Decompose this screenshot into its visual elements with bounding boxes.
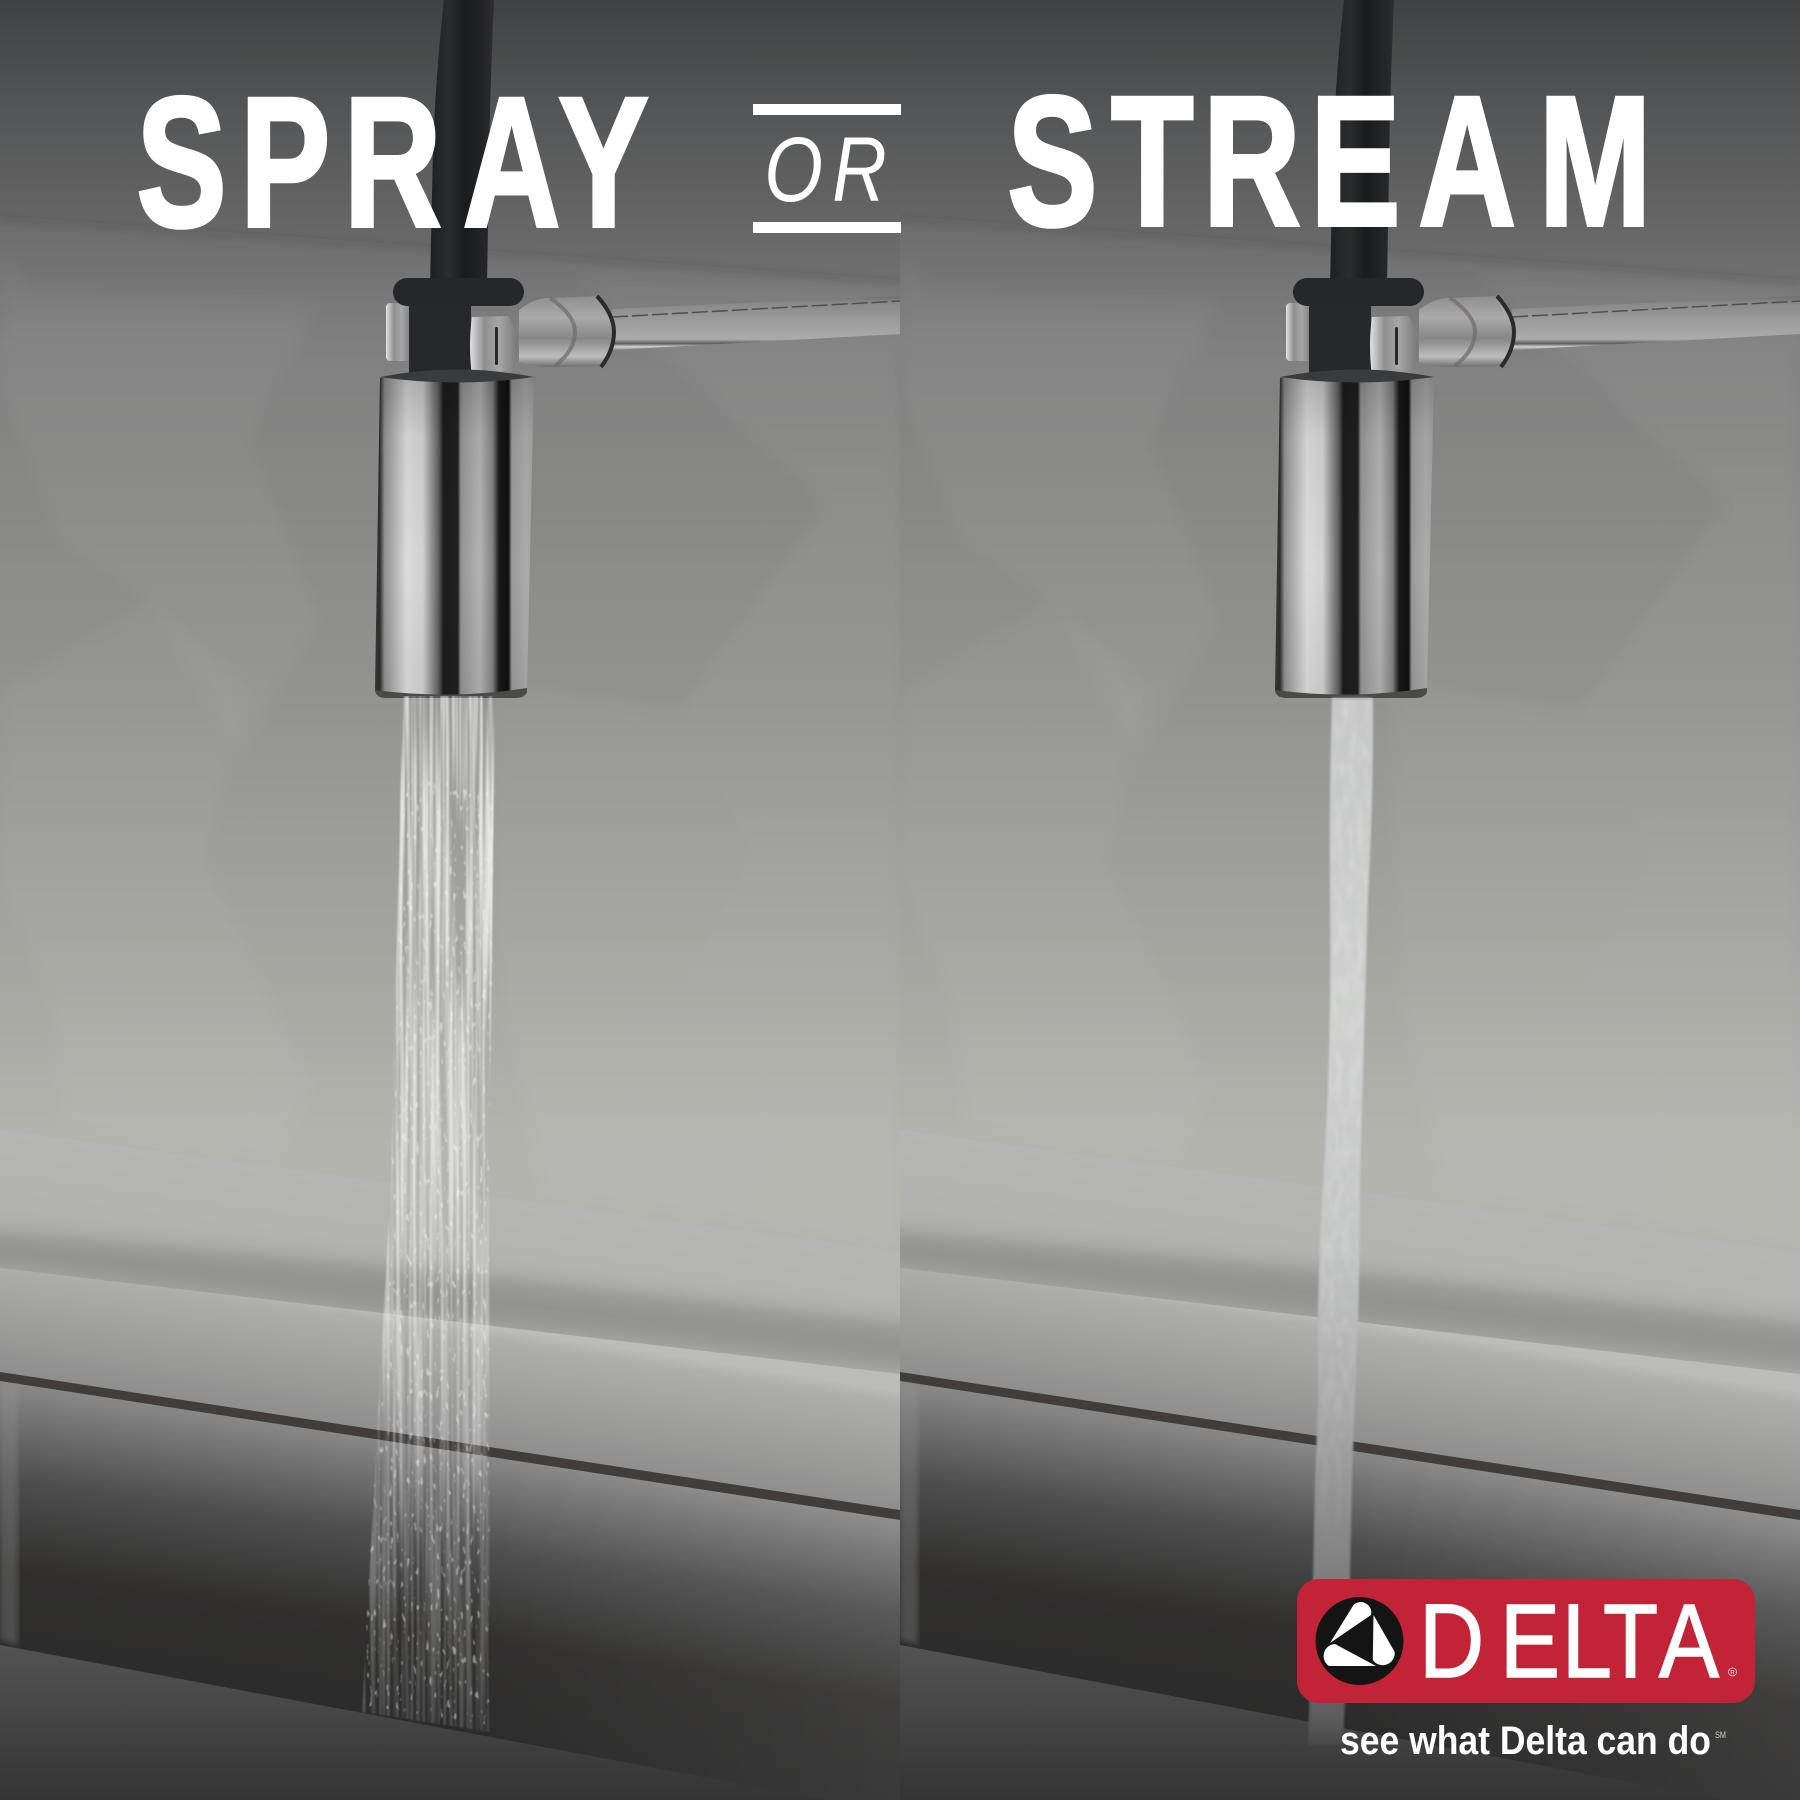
water: spray streaks [362, 696, 495, 1732]
faucet: stream head [1275, 0, 1800, 698]
logo: Delta badge [1297, 1579, 1755, 1703]
registered mark [1728, 1668, 1736, 1676]
connector: OR between rules [753, 104, 901, 233]
wordmark: DELTA: DELTA [1419, 1582, 1720, 1700]
registered mark: R [1730, 1670, 1735, 1676]
water: solid stream [1308, 698, 1373, 1745]
tagline: see what Delta can do [1340, 1719, 1711, 1763]
icon: Delta triangular mark [1316, 1597, 1404, 1685]
panel: spray scene (left photo) [0, 0, 940, 1800]
connector: OR between rules: OR [764, 118, 887, 221]
faucet: spray head [375, 0, 900, 698]
panel: stream scene (right photo) [860, 0, 1800, 1800]
title word: STREAM: STREAM [1007, 58, 1651, 265]
title word: SPRAY: SPRAY [137, 59, 649, 266]
service mark: SM [1715, 1730, 1726, 1740]
